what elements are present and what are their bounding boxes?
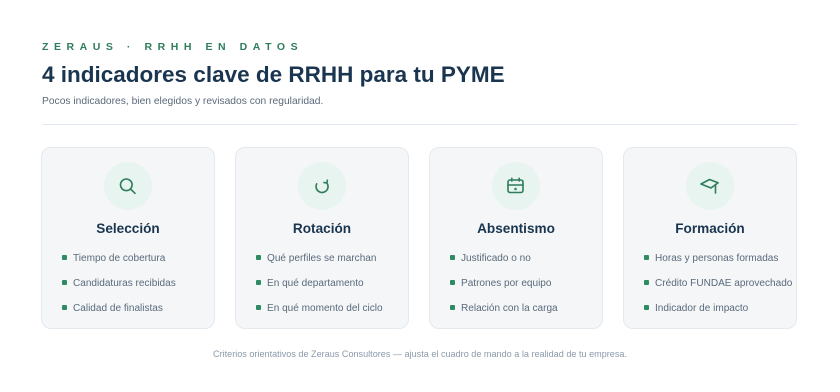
eyebrow label: ZERAUS · RRHH EN DATOS — [42, 41, 303, 53]
list item: Indicador de impacto — [655, 302, 748, 314]
list item: Horas y personas formadas — [655, 252, 778, 264]
title: 4 indicadores clave de RRHH para tu PYME — [42, 62, 505, 86]
list item: En qué momento del ciclo — [267, 302, 383, 314]
icon: magnifying glass — [104, 162, 152, 210]
list item: Tiempo de cobertura — [73, 252, 165, 264]
list item: Patrones por equipo — [461, 278, 552, 288]
list item: Qué perfiles se marchan — [267, 252, 376, 264]
heading: Formación: Formación — [675, 221, 745, 236]
heading: Absentismo: Absentismo — [477, 221, 555, 236]
panel: Formación — [623, 147, 797, 329]
panel: Selección — [41, 147, 215, 329]
list item: Calidad de finalistas — [73, 302, 163, 314]
panel: Absentismo — [429, 147, 603, 329]
list item: Relación con la carga — [461, 302, 558, 314]
footer note: Criterios orientativos de Zeraus Consultores — ajusta el cuadro de mando a la realidad de tu empresa. — [213, 348, 627, 358]
heading: Selección: Selección — [96, 221, 160, 236]
list item: En qué departamento — [267, 278, 364, 288]
icon: calendar — [492, 162, 540, 210]
list item: Justificado o no — [461, 252, 531, 264]
subtitle: Pocos indicadores, bien elegidos y revisados con regularidad. — [42, 96, 323, 106]
panel: Rotación — [235, 147, 409, 329]
list item: Crédito FUNDAE aprovechado — [655, 278, 792, 288]
list item: Candidaturas recibidas — [73, 278, 176, 288]
icon: graduation cap — [686, 162, 734, 210]
icon: rotation arrow — [298, 162, 346, 210]
heading: Rotación: Rotación — [293, 221, 351, 236]
